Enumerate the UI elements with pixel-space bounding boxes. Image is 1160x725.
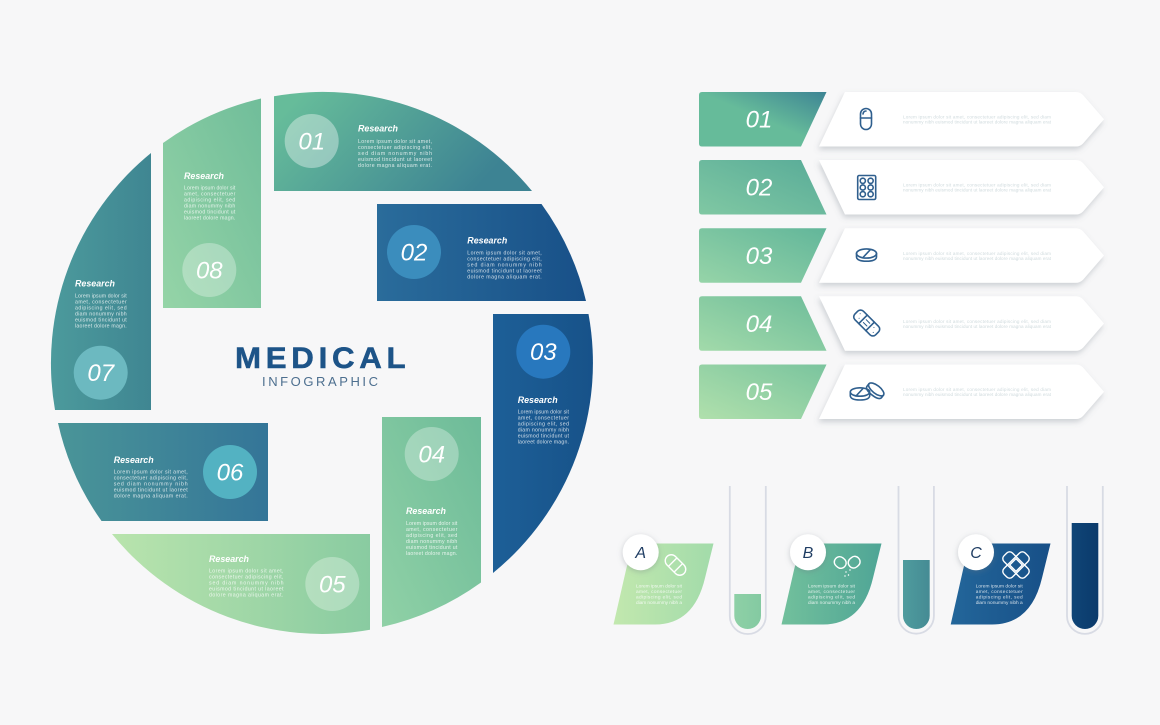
panel: segment 06: Lorem ipsum dolor sit amet,: [114, 470, 188, 476]
panel: segment 02: Lorem ipsum dolor sit amet,: [467, 250, 542, 256]
panel: segment 04: diam nonummy nibh: [406, 539, 457, 545]
panel: segment 01: [274, 92, 532, 191]
panel: segment 03: [493, 314, 593, 573]
panel: segment 05: euismod tincidunt ut laoreet: [209, 587, 284, 593]
card C: Lorem ipsum dolor sit: [976, 583, 1023, 589]
card B: amet, consectetuer: [808, 589, 855, 595]
card A: diam nonummy nibh a: [636, 600, 682, 606]
panel: segment 07: adipiscing elit, sed: [75, 305, 127, 311]
list row 03: Lorem ipsum dolor sit amet, consectetuer adipiscing elit, sed diam: [903, 251, 1051, 256]
panel: segment 04: adipiscing elit, sed: [406, 533, 457, 539]
panel: segment 07: [51, 153, 151, 410]
card A: amet, consectetuer: [636, 589, 682, 595]
panel: segment 03: diam nonummy nibh: [518, 427, 569, 433]
list row 01: Lorem ipsum dolor sit amet, consectetuer adipiscing elit, sed diam: [903, 114, 1051, 120]
list row 04: [699, 296, 1104, 351]
card C: C: [970, 545, 982, 562]
title: [235, 342, 406, 389]
list row 01: [699, 92, 1104, 146]
panel: segment 02: 02: [401, 240, 427, 266]
panel: segment 04: Lorem ipsum dolor sit: [406, 521, 458, 527]
icon: blister pack: [858, 176, 876, 200]
panel: segment 01: Research: [358, 124, 399, 134]
list row 01: 01: [746, 106, 772, 134]
icon: open capsule: [832, 554, 862, 576]
list row 05: [699, 364, 1104, 419]
list row 02: 02: [746, 174, 772, 202]
panel: segment 05: Lorem ipsum dolor sit amet,: [209, 569, 284, 575]
card B: [782, 534, 882, 624]
panel: segment 06: sed diam nonummy nibh: [114, 482, 188, 488]
panel: segment 03: amet, consectetuer: [518, 415, 569, 421]
panel: segment 06: euismod tincidunt ut laoreet: [114, 488, 188, 494]
panel: segment 02: euismod tincidunt ut laoreet: [467, 268, 542, 274]
panel: segment 05: sed diam nonummy nibh: [209, 581, 284, 587]
panel: segment 07: euismod tincidunt ut: [75, 317, 127, 323]
card A: A: [634, 545, 646, 562]
panel: segment 02: Research: [467, 236, 508, 246]
panel: segment 05: [112, 534, 370, 634]
panel: segment 07: diam nonummy nibh: [75, 311, 127, 317]
panel: segment 04: 04: [418, 442, 445, 468]
panel: segment 06: Research: [114, 455, 154, 465]
card B: B: [803, 545, 814, 562]
panel: segment 04: amet, consectetuer: [406, 527, 458, 533]
panel: segment 02: sed diam nonummy nibh: [467, 262, 542, 268]
panel: segment 08: [163, 98, 261, 308]
card C: amet, consectetuer: [976, 589, 1023, 595]
list row 05: nonummy nibh euismod tincidunt ut laoreet dolore magna aliquam erat: [903, 392, 1052, 397]
list row 05: Lorem ipsum dolor sit amet, consectetuer adipiscing elit, sed diam: [903, 387, 1051, 392]
list row 02: nonummy nibh euismod tincidunt ut laoreet dolore magna aliquam erat: [903, 188, 1052, 193]
card A: adipiscing elit, sed: [636, 594, 682, 600]
icon: pill pair: [663, 552, 688, 578]
panel: segment 08: laoreet dolore magn.: [184, 215, 235, 221]
list row 04: Lorem ipsum dolor sit amet, consectetuer adipiscing elit, sed diam: [903, 319, 1051, 324]
icon: tablet: [856, 249, 876, 261]
icon: two tablets: [850, 381, 886, 401]
panel: segment 05: dolore magna aliquam erat.: [209, 593, 284, 599]
card C: adipiscing elit, sed: [976, 594, 1023, 600]
panel: segment 03: Lorem ipsum dolor sit: [518, 409, 570, 415]
panel: segment 03: adipiscing elit, sed: [518, 421, 569, 427]
panel: segment 01: euismod tincidunt ut laoreet: [358, 157, 433, 163]
list row 03: 03: [746, 243, 773, 270]
list row 02: [699, 160, 1104, 214]
card B: diam nonummy nibh a: [808, 600, 855, 606]
panel: segment 07: amet, consectetuer: [75, 299, 127, 305]
list row 04: nonummy nibh euismod tincidunt ut laoreet dolore magna aliquam erat: [903, 324, 1052, 329]
panel: segment 03: Research: [518, 395, 558, 405]
panel: segment 01: sed diam nonummy nibh: [358, 151, 432, 157]
panel: segment 05: Research: [209, 554, 250, 564]
panel: segment 04: euismod tincidunt ut: [406, 545, 458, 551]
panel: segment 02: dolore magna aliquam erat.: [467, 274, 542, 280]
panel: segment 04: [382, 417, 481, 627]
panel: segment 06: dolore magna aliquam erat.: [114, 494, 188, 500]
panel: segment 05: 05: [319, 572, 346, 598]
panel: segment 03: euismod tincidunt ut: [518, 433, 570, 439]
list row 04: 04: [746, 311, 772, 338]
icon: bandage: [852, 308, 881, 338]
list row 03: [699, 228, 1104, 283]
test tube C: [1067, 486, 1103, 634]
icon: capsule: [860, 108, 872, 130]
list row 01: nonummy nibh euismod tincidunt ut laoreet dolore magna aliquam erat: [903, 120, 1052, 124]
list row 03: nonummy nibh euismod tincidunt ut laoreet dolore magna aliquam erat: [903, 256, 1052, 261]
list row 02: Lorem ipsum dolor sit amet, consectetuer adipiscing elit, sed diam: [903, 183, 1051, 188]
panel: segment 06: [58, 423, 268, 521]
panel: segment 01: 01: [298, 128, 325, 156]
panel: segment 01: Lorem ipsum dolor sit amet,: [358, 139, 432, 145]
card A: Lorem ipsum dolor sit: [636, 583, 683, 589]
panel: segment 06: consectetuer adipiscing elit,: [114, 476, 188, 482]
panel: segment 07: laoreet dolore magn.: [75, 323, 127, 329]
card C: diam nonummy nibh a: [976, 600, 1023, 606]
test tube B: [898, 486, 934, 634]
panel: segment 07: Research: [75, 279, 116, 289]
panel: segment 08: diam nonummy nibh: [184, 203, 235, 209]
panel: segment 08: Research: [184, 171, 225, 181]
title: MEDICAL: [235, 342, 406, 375]
panel: segment 03: laoreet dolore magn.: [518, 439, 569, 445]
panel: segment 04: laoreet dolore magn.: [406, 551, 457, 557]
panel: segment 02: consectetuer adipiscing elit,: [467, 256, 542, 262]
test tube A: [730, 486, 766, 634]
panel: segment 05: consectetuer adipiscing elit,: [209, 575, 284, 581]
panel: segment 08: 08: [196, 258, 223, 284]
panel: segment 08: Lorem ipsum dolor sit: [184, 185, 236, 191]
panel: segment 03: 03: [530, 339, 557, 366]
title: INFOGRAPHIC: [262, 374, 378, 389]
panel: segment 08: amet, consectetuer: [184, 191, 236, 197]
card B: Lorem ipsum dolor sit: [808, 583, 856, 589]
panel: segment 07: 07: [87, 360, 116, 387]
panel: segment 02: [377, 204, 586, 301]
panel: segment 08: euismod tincidunt ut: [184, 209, 236, 215]
panel: segment 06: 06: [217, 460, 244, 486]
card C: [951, 534, 1050, 624]
list row 05: 05: [746, 379, 773, 406]
panel: segment 01: dolore magna aliquam erat.: [358, 163, 432, 169]
panel: segment 04: Research: [406, 506, 447, 516]
card A: [614, 534, 714, 624]
panel: segment 01: consectetuer adipiscing elit,: [358, 145, 432, 151]
card B: adipiscing elit, sed: [808, 594, 855, 600]
panel: segment 07: Lorem ipsum dolor sit: [75, 293, 127, 299]
icon: crossed bandages: [1001, 550, 1031, 580]
panel: segment 08: adipiscing elit, sed: [184, 197, 235, 203]
